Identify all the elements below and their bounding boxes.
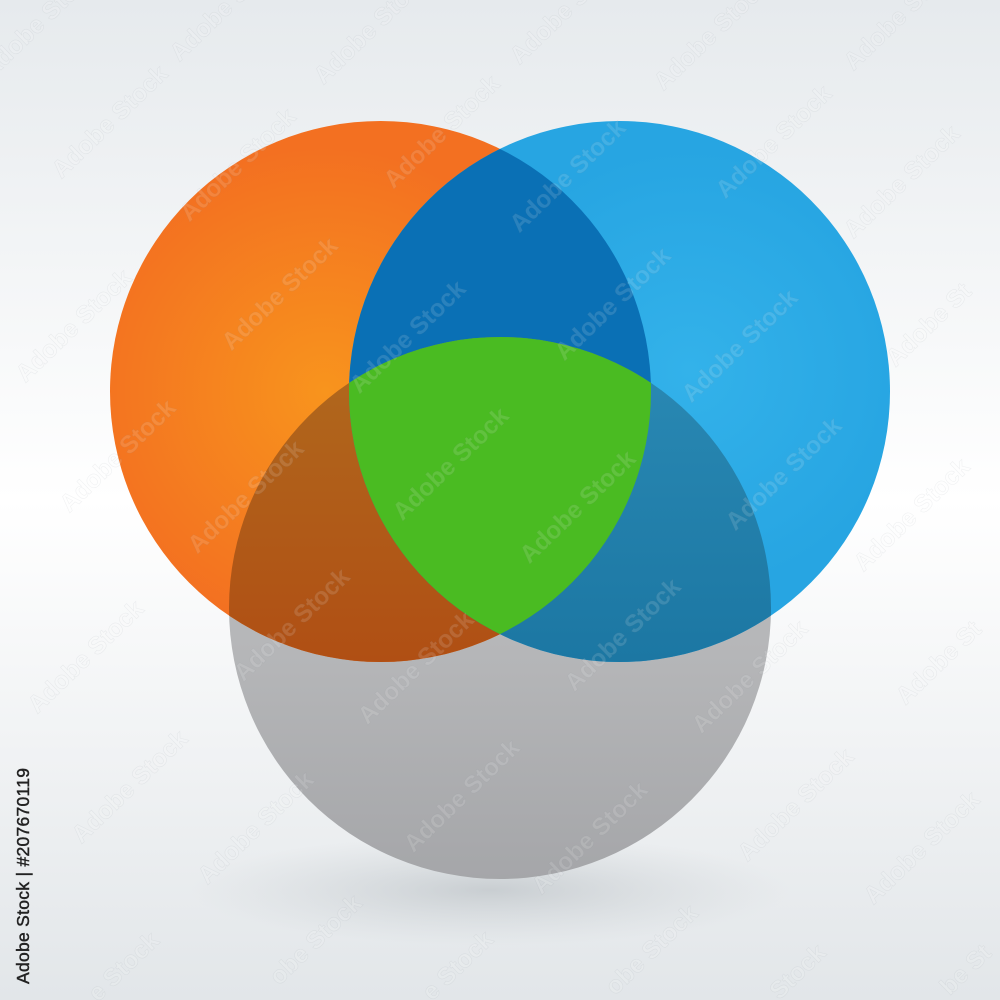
watermark: Adobe Stock [229, 563, 356, 687]
watermark: Adobe Stock [859, 786, 986, 910]
ground shadow [190, 835, 790, 945]
watermark: Adobe Stock [550, 242, 677, 366]
watermark: Adobe Stock [687, 615, 814, 739]
watermark: Adobe Stock [527, 776, 654, 900]
watermark: Adobe Stock [677, 284, 804, 408]
watermark: Adobe Stock [175, 103, 302, 227]
watermark: Adobe Stock [55, 394, 182, 518]
overlap: orange and blue [349, 149, 651, 383]
watermark: obe Stock [265, 889, 368, 990]
watermark: obe Stock [601, 899, 704, 1000]
watermark: Adobe Stock [560, 573, 687, 697]
watermark: Adobe Stock [67, 725, 194, 849]
watermark: Adobe St [881, 278, 977, 372]
watermark: Adobe Stock [193, 766, 320, 890]
watermark: Adobe Stock [515, 445, 642, 569]
overlap: blue and grey [349, 337, 771, 662]
watermark: be St [935, 939, 997, 1000]
stock id number: Adobe Stock | #207670119 [13, 768, 33, 984]
watermark: Adobe Stock [47, 60, 174, 184]
watermark: Adobe Stock [505, 114, 632, 238]
venn diagram [110, 121, 890, 879]
circle: grey [229, 337, 771, 879]
watermark: Adobe St [891, 616, 987, 710]
watermark: Adobe Stock [23, 595, 150, 719]
overlap: centre green [349, 337, 651, 634]
watermark: Adobe Stock [217, 232, 344, 356]
watermark: Adobe Stock [849, 453, 976, 577]
watermark: Adobe Stock [733, 743, 860, 867]
watermark: Adobe Stock [345, 275, 472, 399]
watermark: Adobe Stock [11, 264, 138, 388]
watermark: Adobe Stock [721, 412, 848, 536]
circle: blue [349, 121, 890, 662]
overlap: orange and grey [229, 337, 651, 662]
watermark: Adobe Stock [353, 606, 480, 730]
circle: orange [110, 121, 651, 662]
watermark: Adobe Stock [399, 734, 526, 858]
watermark: Adobe Stock [839, 120, 966, 244]
watermark: Adobe Stock [183, 435, 310, 559]
watermark: Adobe Stock [379, 70, 506, 194]
watermark: Adobe Stock [388, 402, 515, 526]
watermark: Adobe Stock [711, 80, 838, 204]
